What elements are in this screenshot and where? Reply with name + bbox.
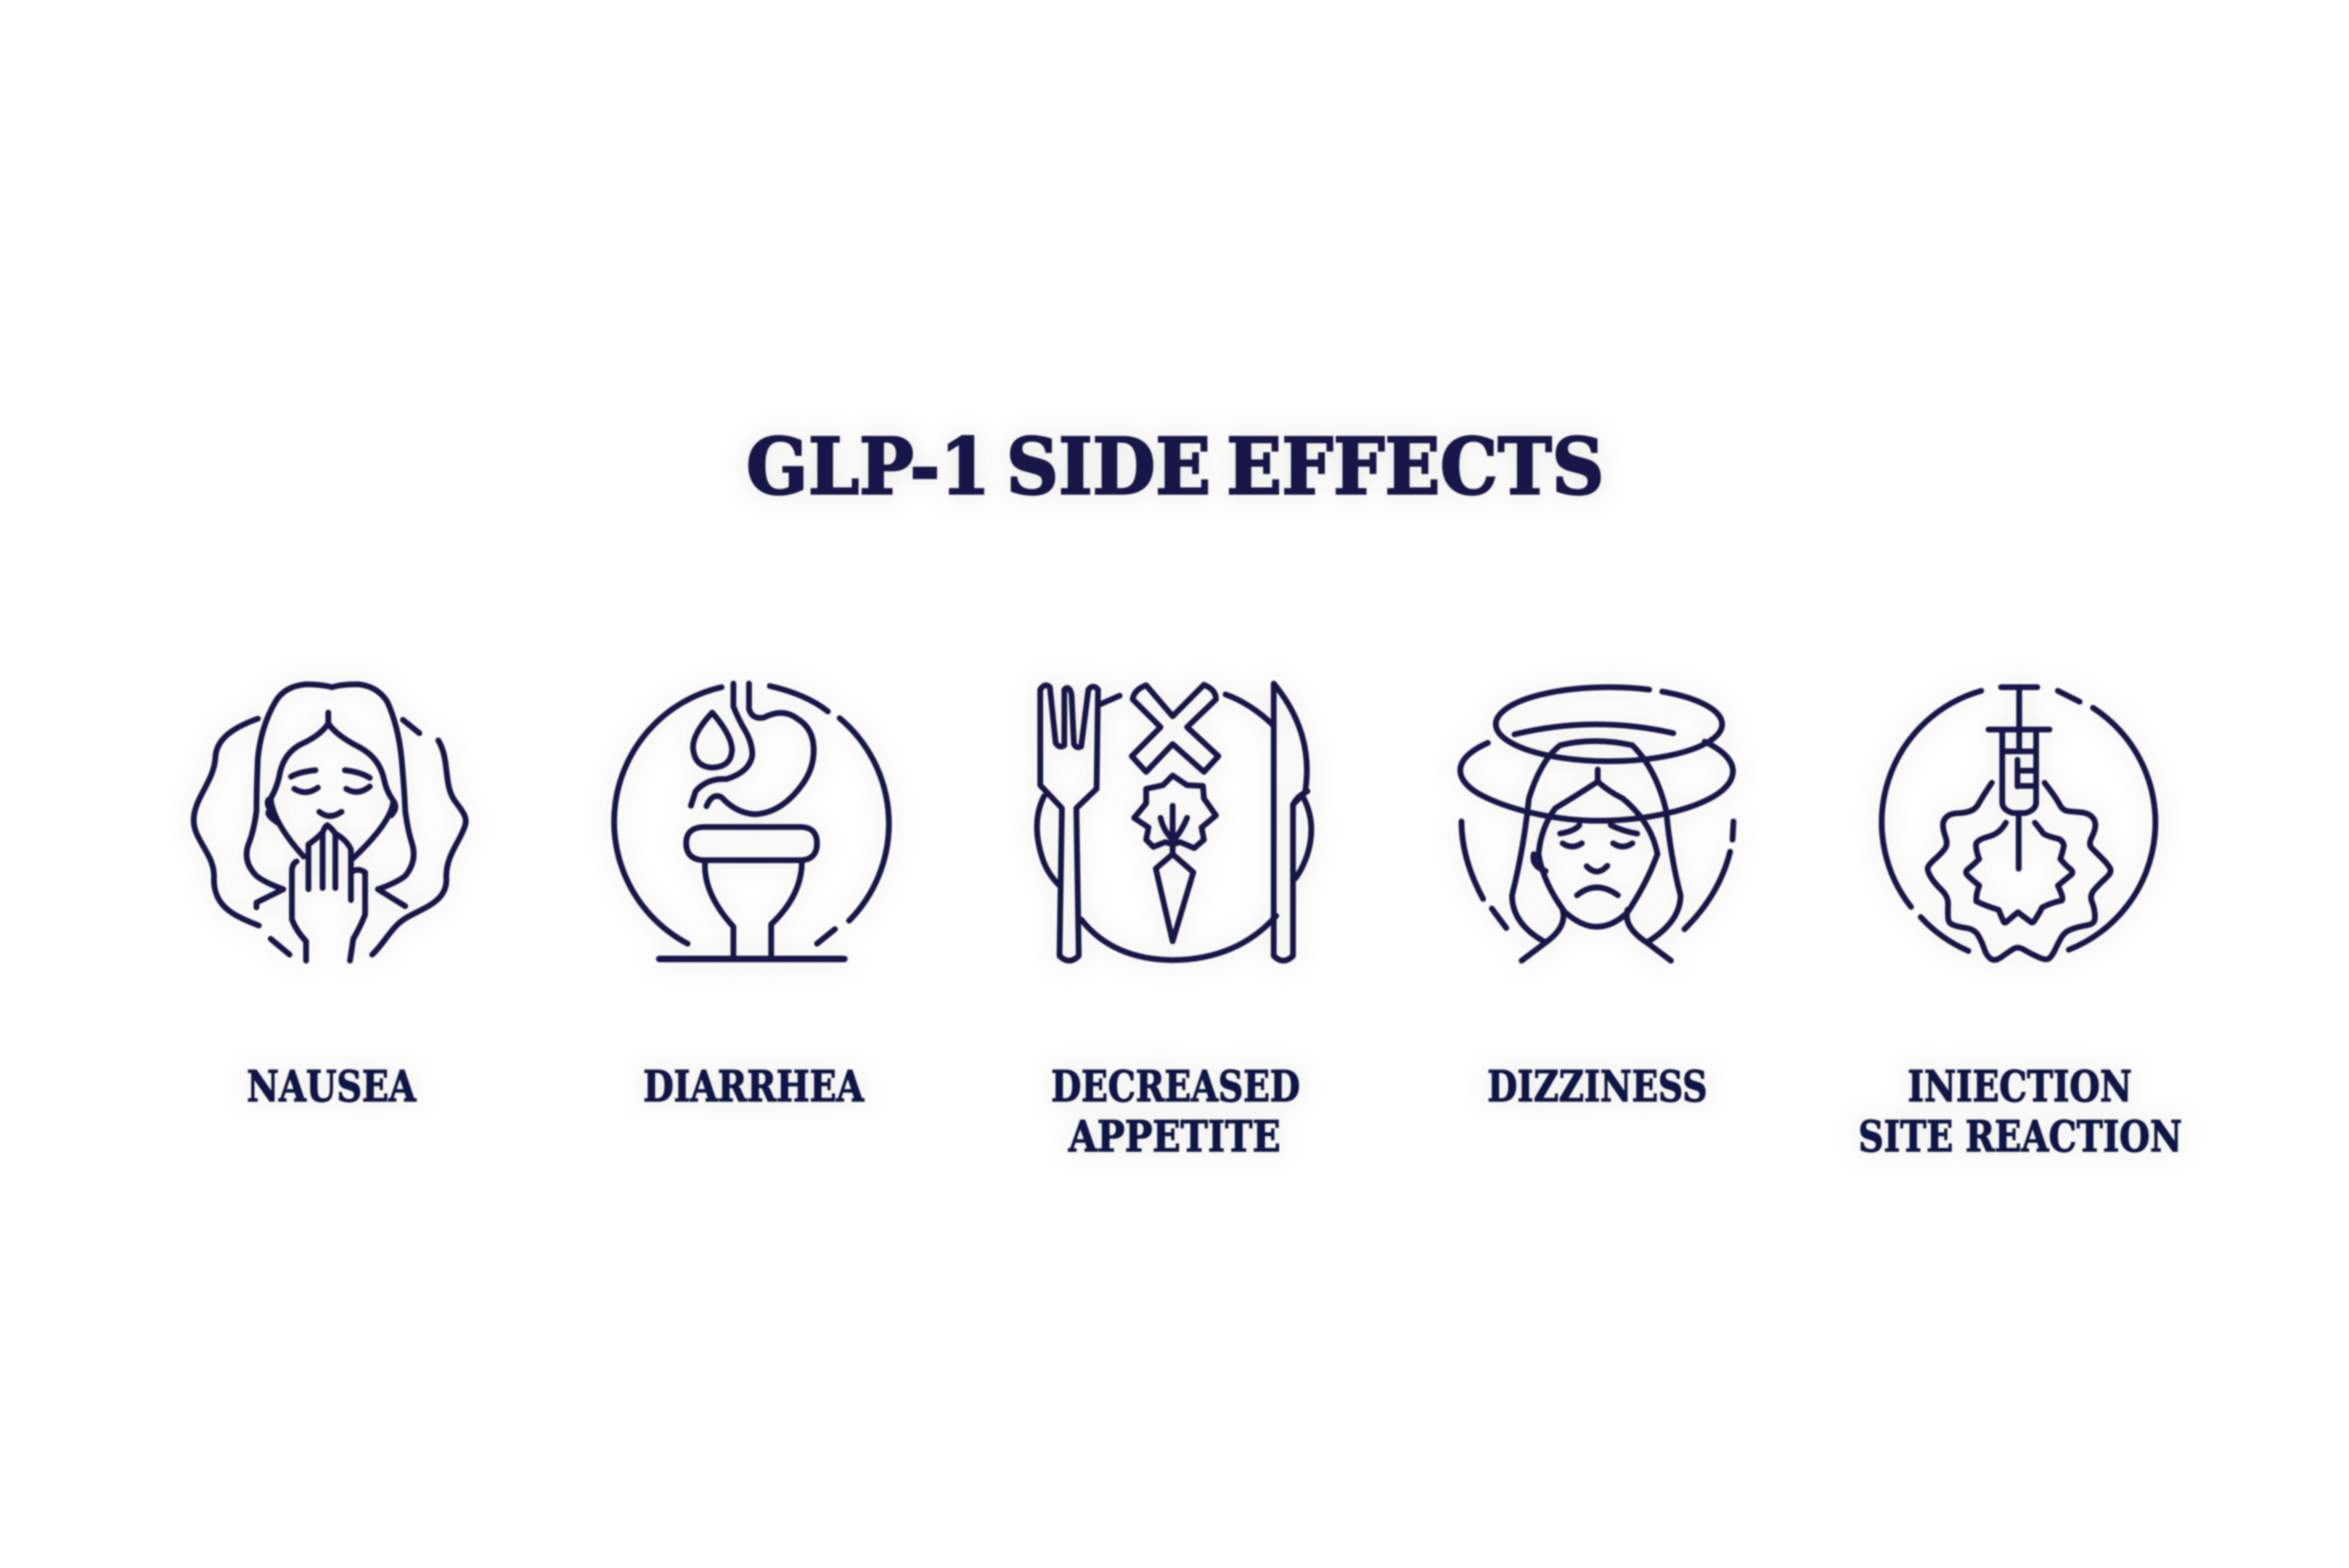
diarrhea: water drop — [693, 713, 732, 767]
label: nausea: NAUSEA — [247, 1061, 417, 1111]
dizziness: hair — [1512, 741, 1680, 960]
icon: injection site reaction — [1882, 687, 2155, 960]
dizziness: spinning rings — [1461, 687, 1733, 929]
diarrhea: toilet — [659, 827, 844, 959]
dizziness: face — [1533, 769, 1657, 927]
title: GLP-1 SIDE EFFECTS — [746, 422, 1604, 513]
nausea: hand — [292, 825, 365, 960]
label: injection site reaction: SITE REACTION — [1858, 1111, 2182, 1161]
nausea: hair — [247, 685, 414, 907]
appetite: cross mark — [1132, 685, 1218, 772]
appetite: knife — [1274, 684, 1307, 960]
nausea: outer wavy ring — [194, 719, 466, 955]
appetite: carrot — [1134, 775, 1216, 942]
icon: decreased appetite — [1037, 684, 1311, 960]
injection: inner reaction ring — [1966, 822, 2072, 923]
appetite: fork — [1040, 685, 1098, 960]
label: injection site reaction — [1858, 1061, 2182, 1161]
label: decreased appetite — [1051, 1061, 1300, 1161]
label: diarrhea: DIARRHEA — [643, 1061, 865, 1111]
injection: broken circle — [1882, 691, 2155, 951]
label: dizziness: DIZZINESS — [1487, 1061, 1707, 1111]
appetite: plate — [1037, 695, 1311, 960]
nausea: face — [268, 713, 396, 859]
label: injection site reaction: INIECTION — [1908, 1061, 2132, 1111]
diarrhea: broken circle — [614, 686, 889, 944]
icon: diarrhea — [614, 684, 889, 959]
label: decreased appetite: APPETITE — [1068, 1111, 1280, 1161]
diarrhea: stomach — [691, 684, 814, 814]
icon: dizziness — [1461, 687, 1733, 960]
label: decreased appetite: DECREASED — [1051, 1061, 1300, 1111]
injection: outer reaction ring — [1928, 783, 2111, 960]
injection: syringe — [1988, 687, 2049, 869]
icon: nausea — [194, 685, 466, 960]
